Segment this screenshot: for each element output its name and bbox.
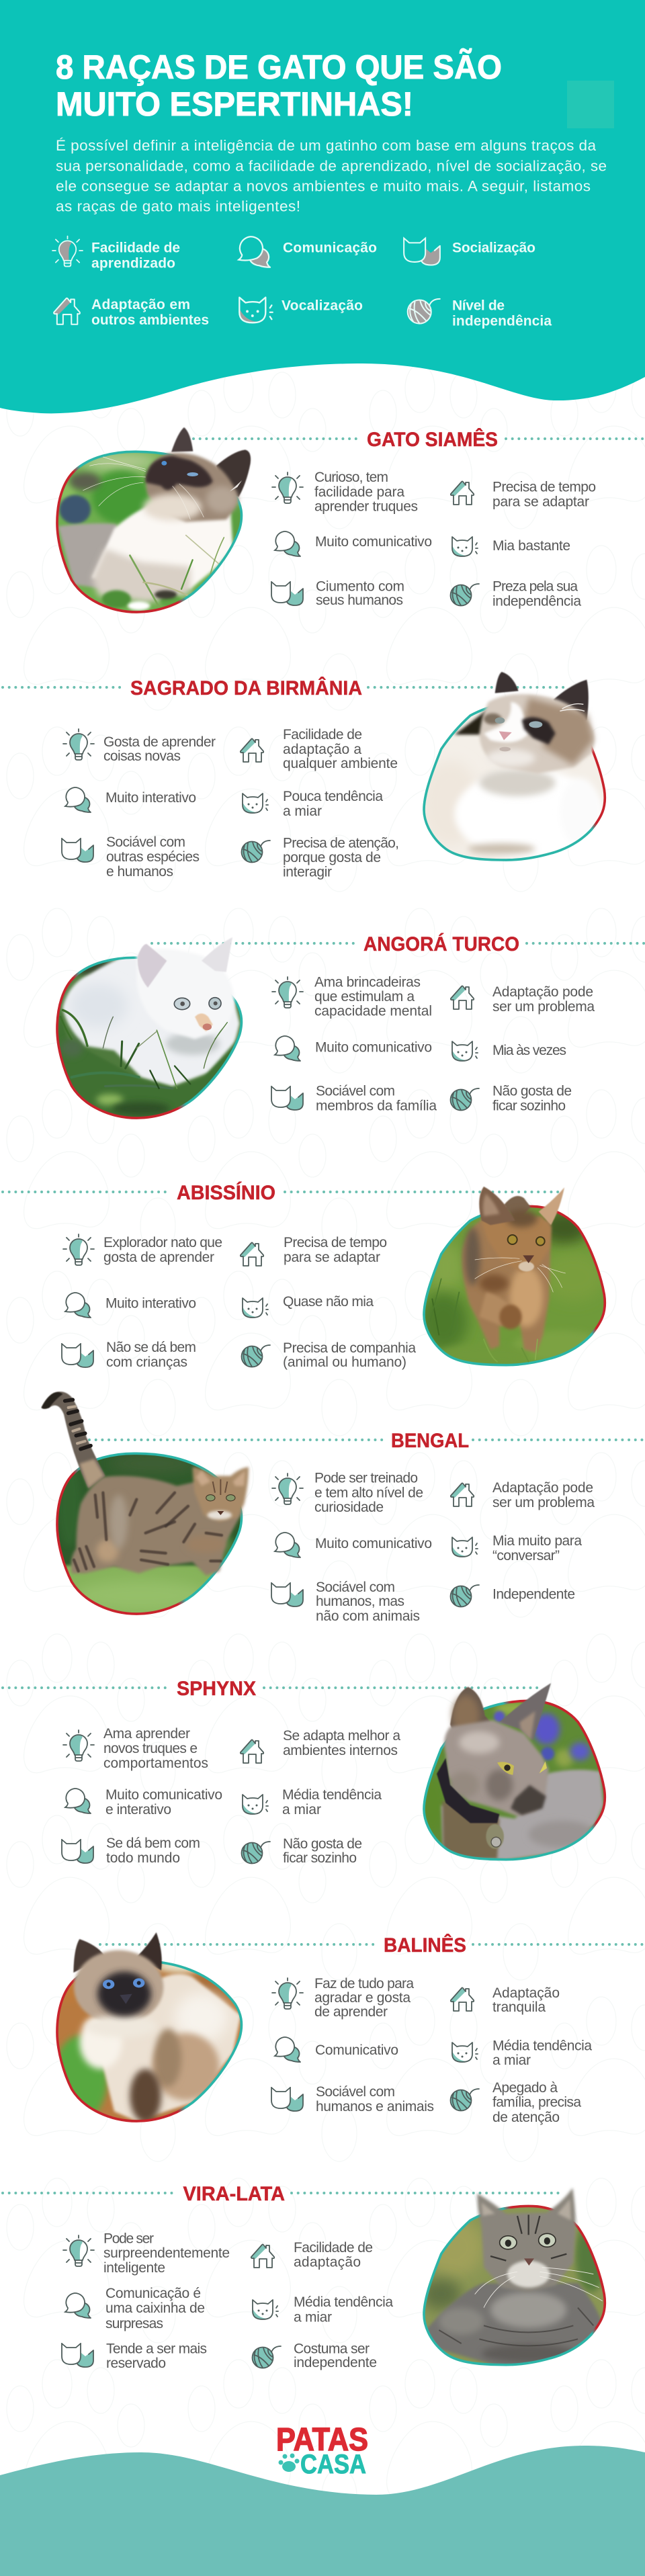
text: uma caixinha de	[105, 2301, 205, 2316]
icon: cat	[243, 793, 268, 813]
section: Sphynx	[3, 1678, 611, 1868]
icon: yarn	[253, 2346, 281, 2368]
item: vocalization	[452, 1041, 566, 1061]
item: socialization	[271, 2084, 434, 2114]
icon: yarn	[450, 1585, 479, 1607]
title: MUITO ESPERTINHAS!	[56, 85, 413, 123]
intro paragraph: ele consegue se adaptar a novos ambientes e muito mais. A seguir, listamos	[56, 177, 591, 195]
divider dots	[194, 437, 645, 440]
legend text: independence: Nível de	[452, 298, 505, 313]
item: socialization	[62, 1836, 200, 1866]
text: família, precisa	[492, 2095, 581, 2110]
text: Adaptação	[492, 1985, 560, 2001]
legend	[52, 236, 552, 329]
item: learning	[63, 1726, 208, 1771]
text: Se dá bem com	[106, 1836, 200, 1851]
text: Gosta de aprender	[103, 734, 216, 750]
text: coisas novas	[103, 748, 181, 764]
heading: ABISSÍNIO	[177, 1181, 275, 1204]
icon: yarn	[450, 584, 479, 606]
text: para se adaptar	[284, 1250, 380, 1265]
text: ficar sozinho	[283, 1850, 357, 1866]
icon: two cats	[271, 1583, 303, 1606]
icon: speech	[275, 531, 300, 556]
text: Adaptação pode	[492, 984, 593, 1000]
text: Precisa de companhia	[283, 1340, 416, 1356]
heading: BALINÊS	[384, 1934, 466, 1957]
icon: two cats	[62, 1840, 93, 1863]
divider dots	[100, 1943, 645, 1946]
heading: SAGRADO DA BIRMÂNIA	[130, 677, 362, 699]
icon: speech	[65, 1789, 91, 1813]
icon: speech	[65, 2293, 91, 2318]
intro paragraph: É possível definir a inteligência de um gatinho com base em alguns traços da	[56, 137, 596, 154]
text: tranquila	[492, 2000, 546, 2015]
text: com crianças	[106, 1355, 187, 1370]
text: Precisa de tempo	[492, 480, 596, 495]
legend icon: speech	[239, 237, 270, 267]
item: independence	[253, 2341, 377, 2370]
item: learning	[63, 2231, 230, 2276]
icon: speech	[275, 2037, 300, 2062]
item: vocalization	[452, 2038, 592, 2068]
legend text: vocalization: Vocalização	[282, 298, 363, 313]
text: humanos, mas	[316, 1594, 404, 1609]
text: Precisa de tempo	[284, 1235, 387, 1250]
heading: BENGAL	[391, 1430, 469, 1452]
text: Ama aprender	[103, 1726, 190, 1742]
icon: house	[451, 481, 474, 505]
item: vocalization	[243, 1294, 374, 1318]
item: communication	[65, 2286, 205, 2331]
icon: bulb	[63, 1730, 94, 1761]
legend text: learning: aprendizado	[91, 255, 175, 271]
photo: bengal cat	[40, 1387, 255, 1624]
item: socialization	[62, 1340, 196, 1370]
icon: two cats	[62, 1344, 93, 1367]
text: Pouca tendência	[283, 789, 383, 804]
icon: speech	[65, 787, 91, 812]
text: Mia bastante	[492, 538, 570, 554]
icon: yarn	[450, 1088, 479, 1110]
icon: house	[251, 2244, 274, 2268]
text: de aprender	[314, 2004, 388, 2020]
text: independência	[492, 594, 581, 609]
item: adaptation	[451, 1480, 595, 1510]
text: Faz de tudo para	[314, 1976, 414, 1991]
icon: cat	[243, 1795, 268, 1814]
legend text: learning: Facilidade de	[91, 241, 180, 255]
text: Sociável com	[106, 834, 185, 850]
legend icon: house	[54, 298, 80, 325]
section: Balinês	[47, 1932, 645, 2127]
text: Muito comunicativo	[315, 1536, 432, 1551]
icon: house	[451, 986, 474, 1009]
text: e interativo	[105, 1802, 171, 1817]
text: Quase não mia	[283, 1294, 374, 1310]
divider dots	[89, 1439, 645, 1441]
item: vocalization	[243, 789, 383, 819]
item: learning	[63, 729, 216, 764]
text: ser um problema	[492, 1495, 595, 1510]
divider dots	[3, 2192, 564, 2194]
text: Precisa de atenção,	[283, 836, 399, 851]
photo: balinese cat	[47, 1932, 255, 2127]
icon: house	[451, 1484, 474, 1506]
heading: SPHYNX	[177, 1678, 256, 1700]
text: qualquer ambiente	[283, 756, 398, 771]
icon: bulb	[63, 729, 94, 760]
icon: bulb	[272, 472, 303, 503]
text: ficar sozinho	[492, 1099, 566, 1114]
heading: ANGORÁ TURCO	[363, 933, 519, 955]
photo: sphynx cat	[423, 1682, 606, 1861]
text: Muito comunicativo	[315, 1040, 432, 1055]
text: Adaptação pode	[492, 1480, 593, 1496]
text: que estimulam a	[314, 989, 415, 1004]
item: adaptation	[251, 2240, 373, 2270]
item: independence	[450, 1585, 575, 1607]
text: a miar	[283, 804, 322, 819]
text: Preza pela sua	[492, 579, 578, 594]
legend text: socialization: Socialização	[452, 241, 535, 255]
icon: yarn	[242, 1842, 270, 1864]
item: communication	[65, 787, 196, 812]
text: surpreendentemente	[103, 2245, 230, 2261]
text: e humanos	[106, 864, 173, 879]
icon: cat	[452, 1537, 478, 1557]
text: adaptação	[294, 2255, 361, 2270]
text: Muito comunicativo	[105, 1787, 222, 1803]
item: socialization	[62, 2341, 207, 2371]
icon: bulb	[272, 977, 303, 1008]
text: Média tendência	[492, 2038, 592, 2053]
text: “conversar”	[492, 1548, 560, 1563]
divider dots	[3, 1191, 560, 1193]
text: membros da família	[316, 1099, 437, 1114]
item: vocalization	[452, 537, 570, 556]
section: Bengal	[40, 1387, 645, 1624]
legend text: independence: independência	[452, 313, 552, 329]
text: novos truques e	[103, 1741, 198, 1756]
title: 8 RAÇAS DE GATO QUE SÃO	[56, 48, 502, 86]
text: (animal ou humano)	[283, 1355, 406, 1370]
header teal wave	[0, 0, 645, 413]
heading: VIRA-LATA	[183, 2183, 285, 2205]
icon: house	[241, 1740, 263, 1763]
icon: cat	[452, 1041, 478, 1061]
text: de atenção	[492, 2110, 560, 2125]
text: Comunicativo	[315, 2043, 398, 2058]
item: learning	[272, 975, 432, 1019]
text: Pode ser treinado	[314, 1470, 418, 1486]
text: gosta de aprender	[103, 1250, 214, 1265]
legend text: adaptation: Adaptação em	[91, 297, 190, 312]
section: Abissínio	[3, 1181, 611, 1371]
item: independence	[450, 579, 581, 609]
divider dots	[3, 686, 568, 689]
logo icon: paw	[278, 2454, 300, 2472]
photo: abyssinian cat	[417, 1183, 611, 1371]
logo word: Casa: CASA	[300, 2450, 366, 2479]
icon: house	[451, 1987, 474, 2011]
legend icon: cat	[239, 298, 273, 323]
item: independence	[450, 1084, 572, 1114]
legend text: communication: Comunicação	[283, 241, 377, 255]
legend icon: social	[404, 238, 440, 265]
text: Ama brincadeiras	[314, 975, 421, 990]
text: Não gosta de	[492, 1084, 572, 1099]
icon: cat	[452, 537, 478, 556]
icon: speech	[275, 1533, 300, 1557]
footer teal wave	[0, 2446, 645, 2576]
text: ambientes internos	[283, 1743, 398, 1758]
item: vocalization	[243, 1787, 382, 1817]
heading: GATO SIAMÊS	[367, 428, 498, 451]
item: adaptation	[241, 1235, 387, 1266]
text: comportamentos	[103, 1756, 208, 1771]
divider dots	[152, 942, 645, 945]
text: seus humanos	[316, 593, 403, 608]
section: Vira-lata	[3, 2182, 611, 2371]
text: aprender truques	[314, 499, 418, 515]
text: Média tendência	[282, 1787, 382, 1803]
icon: speech	[65, 1293, 91, 1318]
item: learning	[63, 1234, 222, 1265]
icon: two cats	[62, 839, 93, 862]
text: Muito interativo	[105, 790, 196, 806]
header panel	[0, 0, 645, 413]
photo: siamese cat	[47, 423, 255, 618]
logo word: Patas: PATAS	[276, 2422, 368, 2458]
text: a miar	[492, 2053, 531, 2068]
icon: speech	[275, 1036, 300, 1061]
icon: yarn	[242, 1345, 270, 1367]
item: adaptation	[451, 480, 596, 510]
photo: tabby cat	[423, 2188, 606, 2366]
item: independence	[242, 836, 399, 880]
text: Facilidade de	[283, 727, 362, 742]
icon: cat	[243, 1298, 268, 1318]
text: a miar	[294, 2310, 332, 2325]
section: Angorá Turco	[47, 933, 645, 1122]
photo: turkish angora cat	[56, 937, 243, 1119]
item: adaptation	[451, 984, 595, 1015]
item: adaptation	[241, 1728, 400, 1763]
item: learning	[272, 1470, 423, 1515]
text: Se adapta melhor a	[283, 1728, 400, 1744]
text: Média tendência	[294, 2294, 393, 2310]
icon: yarn	[242, 841, 270, 863]
icon: house	[241, 1243, 263, 1266]
item: communication	[275, 531, 432, 556]
item: socialization	[271, 579, 404, 608]
item: adaptation	[241, 727, 398, 771]
text: outras espécies	[106, 849, 200, 865]
item: learning	[272, 470, 418, 515]
item: adaptation	[451, 1985, 560, 2015]
text: inteligente	[103, 2260, 165, 2276]
section: Gato Siamês	[47, 423, 645, 618]
text: Sociável com	[316, 2084, 395, 2100]
item: independence	[450, 2080, 581, 2125]
icon: two cats	[271, 582, 303, 605]
text: Não se dá bem	[106, 1340, 196, 1355]
item: vocalization	[452, 1533, 582, 1563]
icon: bulb	[63, 2235, 94, 2266]
text: reservado	[106, 2356, 166, 2371]
divider dots	[3, 1686, 542, 1689]
item: independence	[242, 1340, 416, 1370]
icon: bulb	[272, 1978, 303, 2009]
text: e tem alto nível de	[314, 1485, 423, 1501]
photo: birman cat	[417, 669, 611, 863]
item: communication	[275, 1036, 432, 1061]
text: Sociável com	[316, 1580, 395, 1595]
text: Independente	[492, 1587, 575, 1602]
text: porque gosta de	[283, 850, 381, 865]
item: communication	[275, 2037, 398, 2062]
text: todo mundo	[106, 1850, 180, 1866]
text: Mia muito para	[492, 1533, 582, 1549]
text: curiosidade	[314, 1500, 384, 1515]
item: vocalization	[253, 2294, 393, 2325]
item: independence	[242, 1836, 362, 1866]
text: Facilidade de	[294, 2240, 373, 2256]
text: humanos e animais	[316, 2099, 434, 2114]
text: Apegado à	[492, 2080, 558, 2096]
icon: bulb	[272, 1473, 303, 1504]
icon: bulb	[63, 1234, 94, 1265]
item: learning	[272, 1976, 414, 2020]
icon: cat	[452, 2043, 478, 2062]
text: facilidade para	[314, 484, 404, 500]
icon: yarn	[450, 2089, 479, 2111]
item: communication	[65, 1293, 196, 1318]
text: agradar e gosta	[314, 1990, 411, 2006]
text: Explorador nato que	[103, 1235, 222, 1250]
text: Tende a ser mais	[106, 2341, 207, 2357]
text: a miar	[282, 1802, 321, 1817]
text: Curioso, tem	[314, 470, 388, 485]
legend text: adaptation: outros ambientes	[91, 312, 209, 328]
text: Não gosta de	[283, 1836, 362, 1852]
text: independente	[294, 2355, 377, 2370]
text: Mia às vezes	[492, 1043, 566, 1058]
text: Comunicação é	[105, 2286, 201, 2301]
intro paragraph: as raças de gato mais inteligentes!	[56, 198, 300, 215]
text: Muito comunicativo	[315, 534, 432, 550]
text: ser um problema	[492, 999, 595, 1015]
text: interagir	[283, 865, 332, 880]
text: Ciumento com	[316, 579, 404, 594]
text: capacidade mental	[314, 1004, 432, 1019]
text: adaptação a	[283, 742, 361, 757]
icon: two cats	[271, 1086, 303, 1110]
icon: cat	[253, 2300, 278, 2319]
text: Pode ser	[103, 2231, 154, 2247]
text: Muito interativo	[105, 1295, 196, 1312]
item: communication	[275, 1533, 432, 1557]
faint square	[567, 81, 614, 128]
text: não com animais	[316, 1608, 420, 1624]
section: Sagrado da Birmânia	[3, 669, 611, 880]
text: Sociável com	[316, 1084, 395, 1099]
item: socialization	[62, 834, 200, 879]
logo: Patas da Casa	[276, 2422, 368, 2479]
icon: house	[241, 739, 263, 762]
intro paragraph: sua personalidade, como a facilidade de aprendizado, nível de socialização, se	[56, 157, 607, 175]
item: socialization	[271, 1580, 420, 1624]
text: surpresas	[105, 2316, 163, 2331]
legend icon: bulb	[52, 236, 83, 267]
icon: two cats	[271, 2088, 303, 2111]
item: communication	[65, 1787, 222, 1817]
text: Costuma ser	[294, 2341, 370, 2357]
item: socialization	[271, 1084, 437, 1114]
legend icon: yarn	[408, 299, 440, 324]
icon: two cats	[62, 2344, 93, 2367]
text: para se adaptar	[492, 495, 589, 510]
